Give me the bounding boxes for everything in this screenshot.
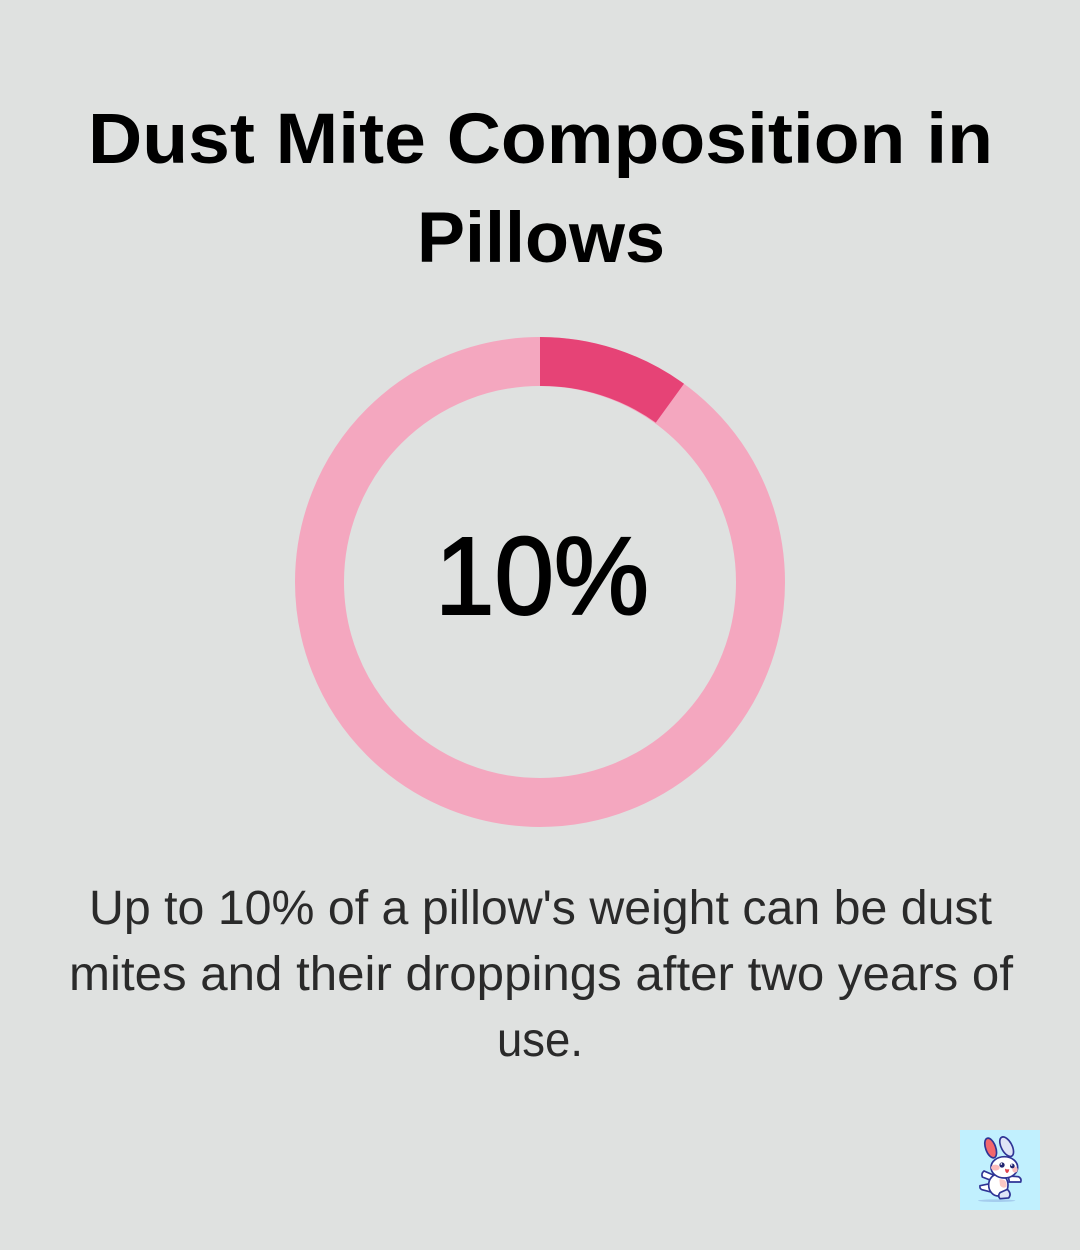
icon background [960,1130,1040,1210]
description text [69,882,1014,1067]
title [88,100,993,278]
description text: Up to 10% of a pillow's weight can be dust [89,882,992,935]
ground shadow [978,1199,1015,1202]
donut track [320,362,760,802]
title: Pillows [417,199,665,278]
center value: 10% [435,515,649,638]
head [991,1157,1018,1178]
description text: use. [497,1014,583,1067]
title: Dust Mite Composition in [88,100,993,179]
body [989,1174,1008,1196]
donut highlighted segment [540,337,684,423]
arms, legs [982,1171,993,1181]
donut chart: 10 percent [320,337,760,802]
description text: mites and their droppings after two years of [69,948,1014,1001]
icon: running rabbit logo [960,1130,1040,1210]
ears [982,1137,999,1159]
